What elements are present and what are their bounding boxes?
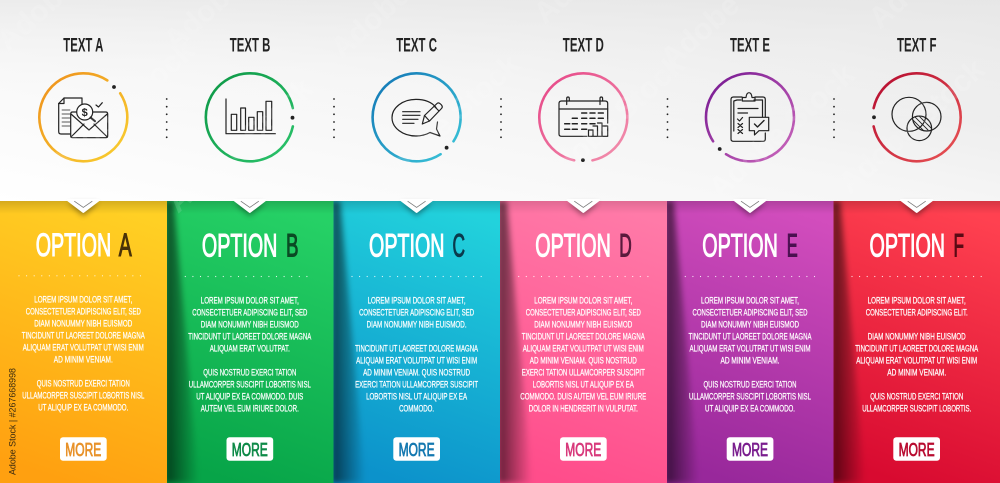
option C more button [393, 437, 440, 461]
option D body text: DIAM NONUMMY NIBH EUISMOD [534, 319, 632, 330]
option C body text: DIAM NONUMMY NIBH EUISMOD. [367, 319, 467, 330]
option B more button: MORE [232, 440, 268, 460]
icon: documents, envelope and magnifier: $ [82, 107, 88, 119]
option A body text: LOREM IPSUM DOLOR SIT AMET, [34, 295, 132, 306]
option D body text: DOLOR IN HENDRERIT IN VULPUTAT. [529, 403, 638, 414]
option D body text: COMMODO. DUIS AUTEM VEL EUM IRIURE [520, 391, 646, 402]
ring C [373, 73, 461, 161]
option C body text: ALIQUAM ERAT VOLUTPAT UT WISI ENIM [356, 355, 477, 366]
option E body text: LOREM IPSUM DOLOR SIT AMET, [701, 295, 799, 306]
option C body text: LOBORTIS NISL UT ALIQUIP EX EA [366, 391, 467, 402]
option A body text: QUIS NOSTRUD EXERCI TATION [37, 379, 130, 390]
icon: speech bubble with pencil [392, 99, 442, 136]
option B body text: LOREM IPSUM DOLOR SIT AMET, [201, 295, 299, 306]
ring B [206, 73, 294, 161]
option B heading: B [286, 228, 298, 264]
ring D [539, 73, 627, 162]
option A body text [22, 295, 145, 414]
option A heading: A [119, 227, 132, 263]
option D heading: D [619, 228, 632, 264]
panel: option F [832, 201, 1000, 483]
icon: documents, envelope and magnifier [59, 98, 108, 138]
icon: calendar with chart [559, 97, 608, 136]
option B body text [188, 295, 312, 414]
option D body text: ALIQUAM ERAT VOLUTPAT UT WISI ENIM [523, 343, 644, 354]
option C body text [355, 295, 478, 414]
panel: option D [498, 201, 667, 483]
icon: venn diagram [892, 97, 941, 141]
option D more button: MORE [565, 440, 601, 460]
heading: text B: TEXT B [230, 35, 270, 57]
heading: text F: TEXT F [897, 35, 937, 57]
option D body text: LOBORTIS NISL UT ALIQUIP EX EA [533, 379, 634, 390]
option C body text: TINCIDUNT UT LAOREET DOLORE MAGNA [355, 343, 478, 354]
column separators [166, 98, 835, 138]
watermarks: Adobe Stock [161, 72, 319, 219]
option B body text: CONSECTETUER ADIPISCING ELIT, SED [192, 307, 307, 318]
option C more button: MORE [399, 440, 435, 460]
heading: text D: TEXT D [563, 35, 604, 57]
panel: option A [0, 201, 167, 483]
option C body text: COMMODO. [399, 403, 434, 414]
option E body text: AD MINIM VENIAM. [720, 355, 780, 366]
option E body text: DIAM NONUMMY NIBH EUISMOD [701, 319, 799, 330]
option B heading: OPTION [202, 228, 277, 264]
option E body text: UT ALIQUIP EX EA COMMODO. [705, 403, 795, 414]
option A more button [60, 437, 107, 461]
option D more button [560, 437, 607, 461]
option A body text: UT ALIQUIP EX EA COMMODO. [38, 403, 128, 414]
option B body text: AUTEM VEL EUM IRIURE DOLOR. [201, 403, 299, 414]
option B body text: DIAM NONUMMY NIBH EUISMOD [201, 319, 299, 330]
option A more button: MORE [65, 440, 101, 460]
option A body text: DIAM NONUMMY NIBH EUISMOD [34, 319, 132, 330]
option C body text: AD MINIM VENIAM. QUIS NOSTRUD [363, 367, 470, 378]
option D body text: AD MINIM VENIAM. QUIS NOSTRUD [530, 355, 637, 366]
watermarks: Adobe Stock [533, 48, 691, 195]
option A body text: CONSECTETUER ADIPISCING ELIT, SED [26, 307, 141, 318]
option F heading: OPTION [870, 228, 945, 264]
option B body text: ALIQUAM ERAT VOLUTPAT. [210, 343, 290, 354]
option C body text: EXERCI TATION ULLAMCORPER SUSCIPIT [355, 379, 478, 390]
ring F [872, 73, 961, 161]
option D body text: TINCIDUNT UT LAOREET DOLORE MAGNA [522, 331, 645, 342]
option C heading: OPTION [369, 228, 444, 264]
option F more button: MORE [899, 440, 935, 460]
option F heading: F [954, 228, 964, 264]
watermarks: Adobe Stock [43, 34, 201, 181]
option E body text: TINCIDUNT UT LAOREET DOLORE MAGNA [688, 331, 812, 342]
icon: clipboard checklist [731, 93, 769, 141]
heading: text E: TEXT E [730, 35, 770, 57]
option F more button [893, 437, 940, 461]
option D body text [520, 295, 646, 414]
option C heading: C [452, 228, 465, 264]
watermarks: Adobe Stock [833, 53, 991, 200]
option F body text [855, 295, 979, 414]
top background area [0, 0, 1000, 202]
option B body text: QUIS NOSTRUD EXERCI TATION [203, 367, 296, 378]
option E heading: OPTION [702, 228, 778, 264]
option B body text: ULLAMCORPER SUSCIPIT LOBORTIS NISL [189, 379, 311, 390]
panel: option C [332, 201, 500, 483]
option A body text: ULLAMCORPER SUSCIPIT LOBORTIS NISL [22, 391, 145, 402]
option D heading: OPTION [535, 228, 611, 264]
watermarks: Adobe Stock [703, 58, 861, 205]
ring A [39, 73, 127, 161]
option A body text: AD MINIM VENIAM. [54, 355, 113, 366]
option B body text: UT ALIQUIP EX EA COMMODO. DUIS [196, 391, 303, 402]
watermarks [0, 0, 991, 219]
option F body text: AD MINIM VENIAM. [887, 367, 946, 378]
option A body text: TINCIDUNT UT LAOREET DOLORE MAGNA [22, 331, 145, 342]
heading: text C: TEXT C [396, 35, 437, 57]
option E body text [688, 295, 812, 414]
pointer notches [68, 200, 932, 216]
option D body text: LOREM IPSUM DOLOR SIT AMET, [534, 295, 632, 306]
option E body text: ALIQUAM ERAT VOLUTPAT UT WISI ENIM [690, 343, 811, 354]
option C body text: LOREM IPSUM DOLOR SIT AMET, [368, 295, 466, 306]
option B more button [226, 437, 273, 461]
option E body text: CONSECTETUER ADIPISCING ELIT, SED [692, 307, 808, 318]
option E body text: QUIS NOSTRUD EXERCI TATION [704, 379, 797, 390]
watermarks: Adobe Stock [368, 48, 526, 195]
option A heading: OPTION [36, 227, 111, 263]
option B body text: TINCIDUNT UT LAOREET DOLORE MAGNA [188, 331, 312, 342]
vertical stock credit: Adobe Stock | #267668998 [7, 368, 18, 475]
option D body text: EXERCI TATION ULLAMCORPER SUSCIPIT [522, 367, 645, 378]
option E heading: E [787, 228, 798, 264]
ring E [706, 73, 794, 161]
panel: option E [665, 201, 834, 483]
option E more button [727, 437, 773, 461]
option E body text: ULLAMCORPER SUSCIPIT LOBORTIS NISL [689, 391, 811, 402]
option D body text: CONSECTETUER ADIPISCING ELIT, SED [526, 307, 641, 318]
heading: text A: TEXT A [63, 35, 103, 57]
option A body text: ALIQUAM ERAT VOLUTPAT UT WISI ENIM [23, 343, 144, 354]
option E more button: MORE [732, 440, 768, 460]
icon: bar chart [226, 99, 275, 134]
panel: option B [165, 201, 334, 483]
option C body text: CONSECTETUER ADIPISCING ELIT, SED [359, 307, 474, 318]
